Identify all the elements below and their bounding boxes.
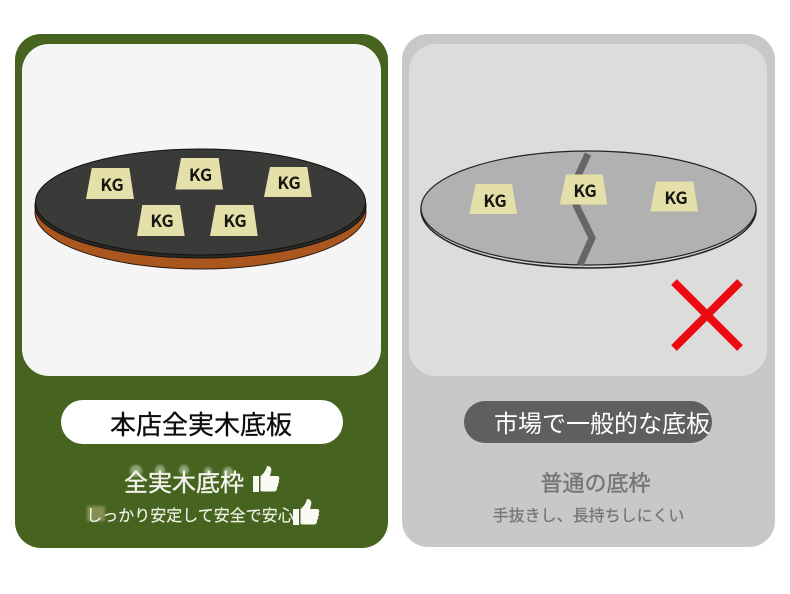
caption with thumb xyxy=(86,499,319,525)
illustration: cracked board with three weights xyxy=(421,151,756,268)
panel background: gray xyxy=(402,34,775,547)
board top surface xyxy=(421,151,756,265)
label pill: 市場で一般的な底板 xyxy=(494,411,710,438)
weight 3: KG xyxy=(277,169,301,194)
illustration: board with five weights xyxy=(35,149,366,269)
weight 1: KG xyxy=(100,171,124,196)
panel: ordinary board xyxy=(402,34,775,547)
weight 1: KG xyxy=(483,187,507,212)
weight 5: KG xyxy=(223,207,247,232)
weight 3: KG xyxy=(664,184,688,209)
subtitle with thumb: 全実木底枠 xyxy=(124,470,244,497)
caption: 手抜きし、長持ちしにくい xyxy=(493,507,684,525)
weight 2 xyxy=(175,158,223,190)
board dark side xyxy=(35,154,366,258)
subtitle with thumb xyxy=(124,466,279,497)
label pill: 本店全実木底板 xyxy=(110,410,292,440)
weight 3 xyxy=(264,167,312,197)
board wood layer xyxy=(35,155,366,269)
label pill xyxy=(61,400,343,444)
weight 4: KG xyxy=(150,207,174,232)
icon: thumbs up xyxy=(253,466,279,492)
label pill xyxy=(464,401,712,443)
weight 2 xyxy=(560,174,607,204)
board underside xyxy=(421,152,756,268)
caption with thumb: しっかり安定して安全で安心 xyxy=(86,507,294,525)
weight 2: KG xyxy=(189,161,212,186)
crack xyxy=(576,154,592,265)
compression artifacts above subtitle xyxy=(87,465,233,521)
weight 3 xyxy=(650,182,698,212)
subtitle: 普通の底枠 xyxy=(540,471,651,496)
illustration card xyxy=(409,44,767,376)
illustration card xyxy=(22,44,381,376)
panel background: green xyxy=(15,34,388,548)
panel: solid wood board xyxy=(15,34,388,548)
weight 1 xyxy=(469,184,517,214)
board top surface xyxy=(36,149,366,255)
weight 5 xyxy=(210,205,258,236)
weight 1 xyxy=(86,168,134,199)
icon: thumbs up small xyxy=(293,499,319,525)
weight 4 xyxy=(137,205,185,236)
weight 2: KG xyxy=(573,177,597,202)
icon: red cross xyxy=(674,282,740,348)
